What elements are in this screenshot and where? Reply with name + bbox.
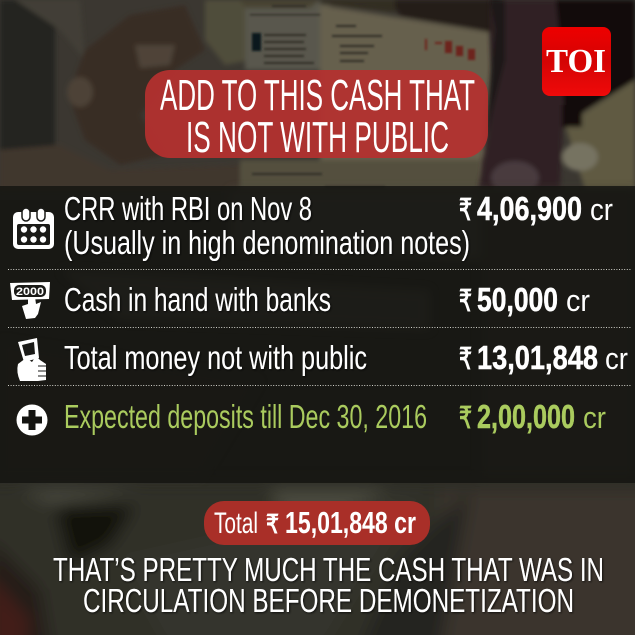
row: total money value: 13,01,848	[477, 339, 598, 376]
total pill	[204, 501, 430, 545]
row: CRR value: cr	[590, 192, 613, 227]
title pill: IS NOT WITH PUBLIC	[186, 113, 449, 162]
row: CRR label	[64, 190, 470, 261]
dark data panel	[0, 186, 635, 483]
icon: 2000 note in hand	[10, 282, 50, 319]
row: cash in hand value: ₹	[459, 285, 472, 318]
row: cash in hand label: Cash in hand with banks	[64, 281, 331, 318]
title pill	[145, 70, 488, 162]
row: total money value: cr	[605, 341, 628, 376]
lower blurred background	[0, 483, 635, 635]
icon: calendar	[13, 208, 54, 249]
icon: plus	[16, 404, 48, 436]
row: expected deposits label: Expected deposits till Dec 30, 2016	[64, 398, 427, 435]
logo: TOI	[542, 27, 611, 96]
icon: 2000 note in hand: 2000	[16, 286, 44, 298]
logo: TOI: TOI	[546, 43, 606, 80]
row: cash in hand value: 50,000	[477, 281, 558, 318]
row: CRR value: ₹	[459, 194, 472, 227]
panel backdrop texture	[0, 190, 635, 480]
row: expected deposits value: cr	[583, 400, 606, 435]
row: cash in hand value: cr	[566, 283, 590, 318]
row: expected deposits value: 2,00,000	[477, 398, 575, 435]
closing statement	[53, 551, 604, 619]
icon: hand holding cash	[17, 338, 46, 381]
row: CRR value: 4,06,900	[477, 190, 582, 227]
total pill: ₹	[266, 509, 279, 539]
total pill: Total	[214, 507, 258, 540]
row: total money label: Total money not with public	[64, 339, 367, 376]
row: CRR label: (Usually in high denomination notes)	[64, 224, 470, 261]
row: CRR label: CRR with RBI on Nov 8	[64, 190, 312, 227]
total pill: 15,01,848 cr	[285, 505, 416, 540]
row: expected deposits value: ₹	[459, 402, 472, 435]
row: total money value: ₹	[459, 343, 472, 376]
